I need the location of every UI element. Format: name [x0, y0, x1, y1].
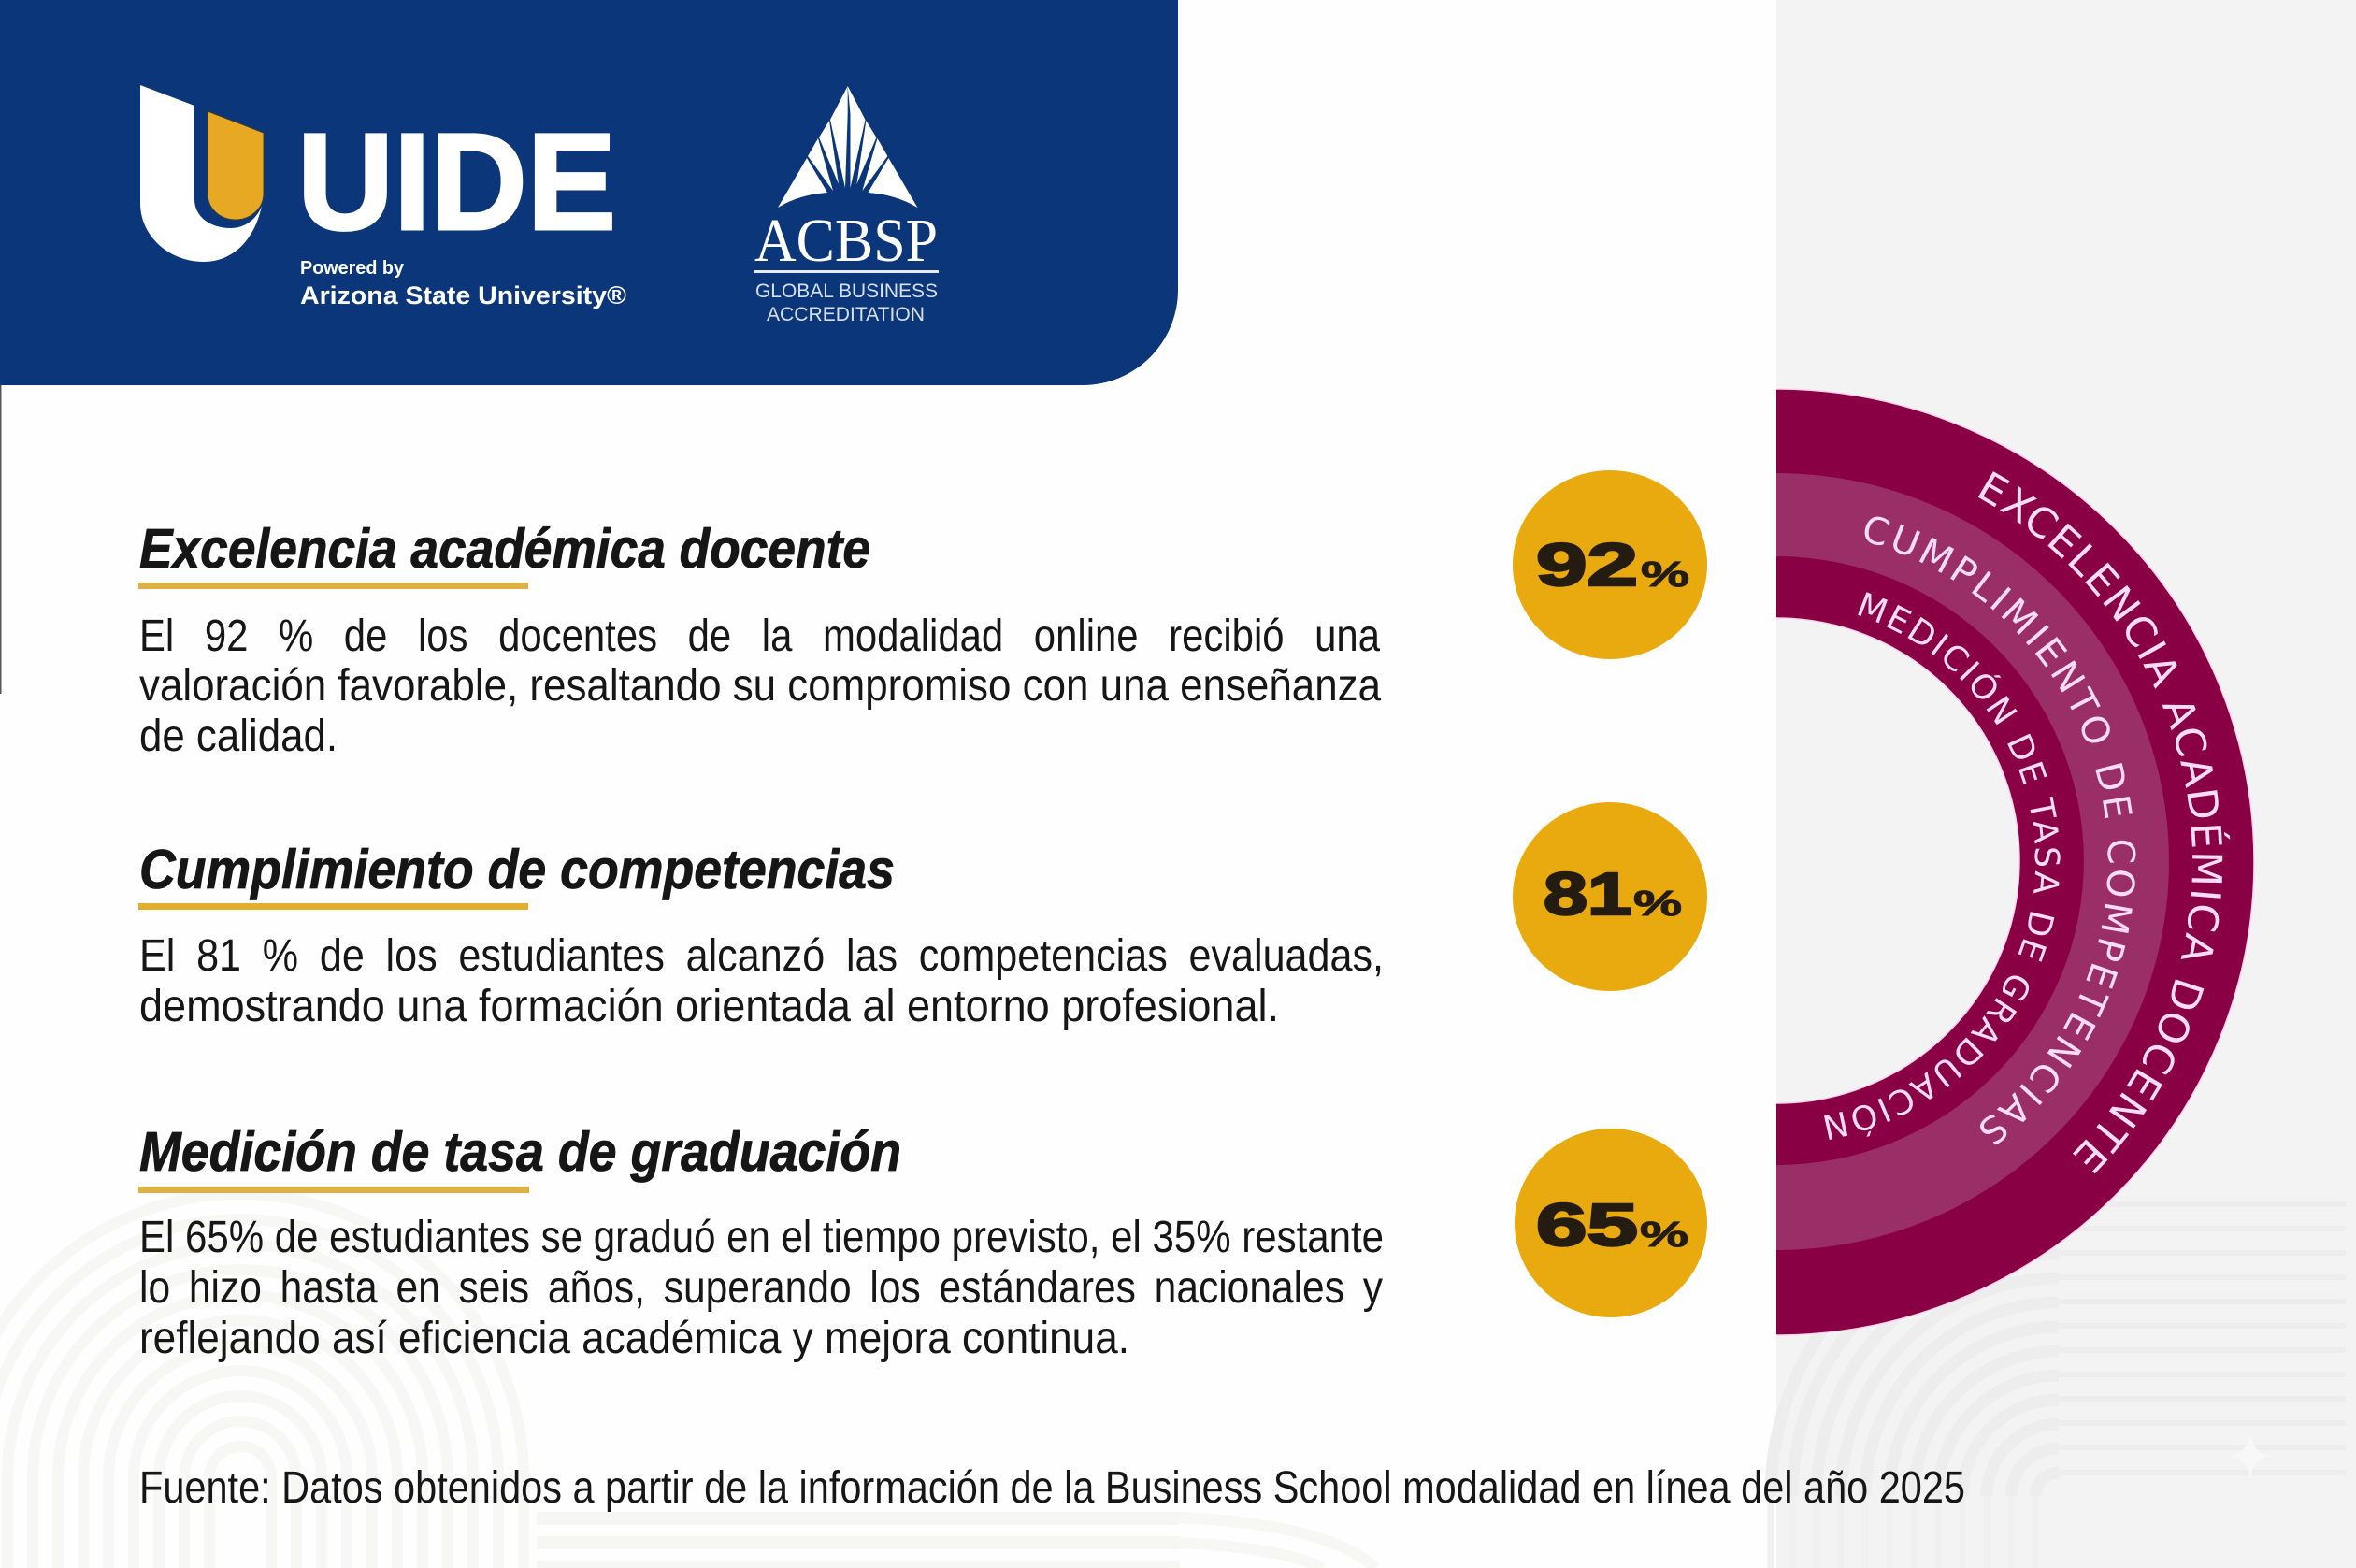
ACBSP lettering: ACBSP: [754, 207, 938, 275]
header banner: [0, 0, 1178, 385]
accreditation: ACCREDITATION: [767, 304, 925, 325]
body text: valoración favorable, resaltando su compromiso con una enseñanza: [139, 661, 1381, 711]
badge: 65%: [1515, 1129, 1707, 1317]
heading: Excelencia académica docente: [139, 518, 870, 580]
body text: lo hizo hasta en seis años, superando los estándares nacionales y: [139, 1263, 1383, 1313]
body text: demostrando una formación orientada al entorno profesional.: [139, 982, 1279, 1031]
icon: ACBSP triangle: [778, 86, 917, 208]
powered by: Powered by: [300, 258, 405, 279]
ring label: excelencia: EXCELENCIA ACADÉMICA DOCENTE: [1978, 471, 2231, 1174]
logo: ACBSP: [754, 86, 939, 325]
badge: 92%: [1513, 470, 1707, 659]
body text: reflejando así eficiencia académica y mejora continua.: [139, 1314, 1129, 1363]
body text: [139, 931, 1384, 1031]
section: Cumplimiento de competencias: [138, 839, 1384, 1031]
badge: 81%: 81: [1544, 860, 1631, 928]
badge: 92%: 92: [1536, 531, 1638, 598]
global business: GLOBAL BUSINESS: [755, 281, 938, 302]
ring label: medicion: MEDICIÓN DE TASA DE GRADUACIÓN: [1824, 592, 2061, 1140]
badge: 92%: %: [1641, 555, 1689, 595]
logo: UIDE: [140, 85, 626, 309]
heading: Cumplimiento de competencias: [139, 839, 895, 900]
body text: El 65% de estudiantes se graduó en el tiempo previsto, el 35% restante: [139, 1213, 1384, 1262]
ring label: cumplimiento: CUMPLIMIENTO DE COMPETENCIAS: [1864, 516, 2135, 1144]
body text: [139, 1213, 1384, 1363]
body text: [139, 611, 1381, 761]
section: Medición de tasa de graduación: [138, 1121, 1384, 1363]
icon: UIDE shield: [140, 85, 264, 262]
badge: 65%: %: [1640, 1216, 1688, 1255]
section: Excelencia académica docente: [138, 518, 1381, 761]
badge: 65%: 65: [1536, 1191, 1638, 1259]
badge: 81%: [1513, 802, 1707, 991]
body text: El 81 % de los estudiantes alcanzó las competencias evaluadas,: [139, 931, 1384, 981]
body text: de calidad.: [139, 712, 338, 761]
semicircular ring chart: [1776, 388, 2255, 1336]
source note: Fuente: Datos obtenidos a partir de la información de la Business School modalidad en línea del año 2025: [139, 1463, 1965, 1513]
Arizona State University: Arizona State University®: [300, 281, 626, 309]
body text: El 92 % de los docentes de la modalidad online recibió una: [139, 611, 1380, 661]
badge: 81%: %: [1633, 885, 1682, 924]
wordmark UIDE: UIDE: [297, 106, 616, 259]
heading: Medición de tasa de graduación: [139, 1121, 901, 1183]
